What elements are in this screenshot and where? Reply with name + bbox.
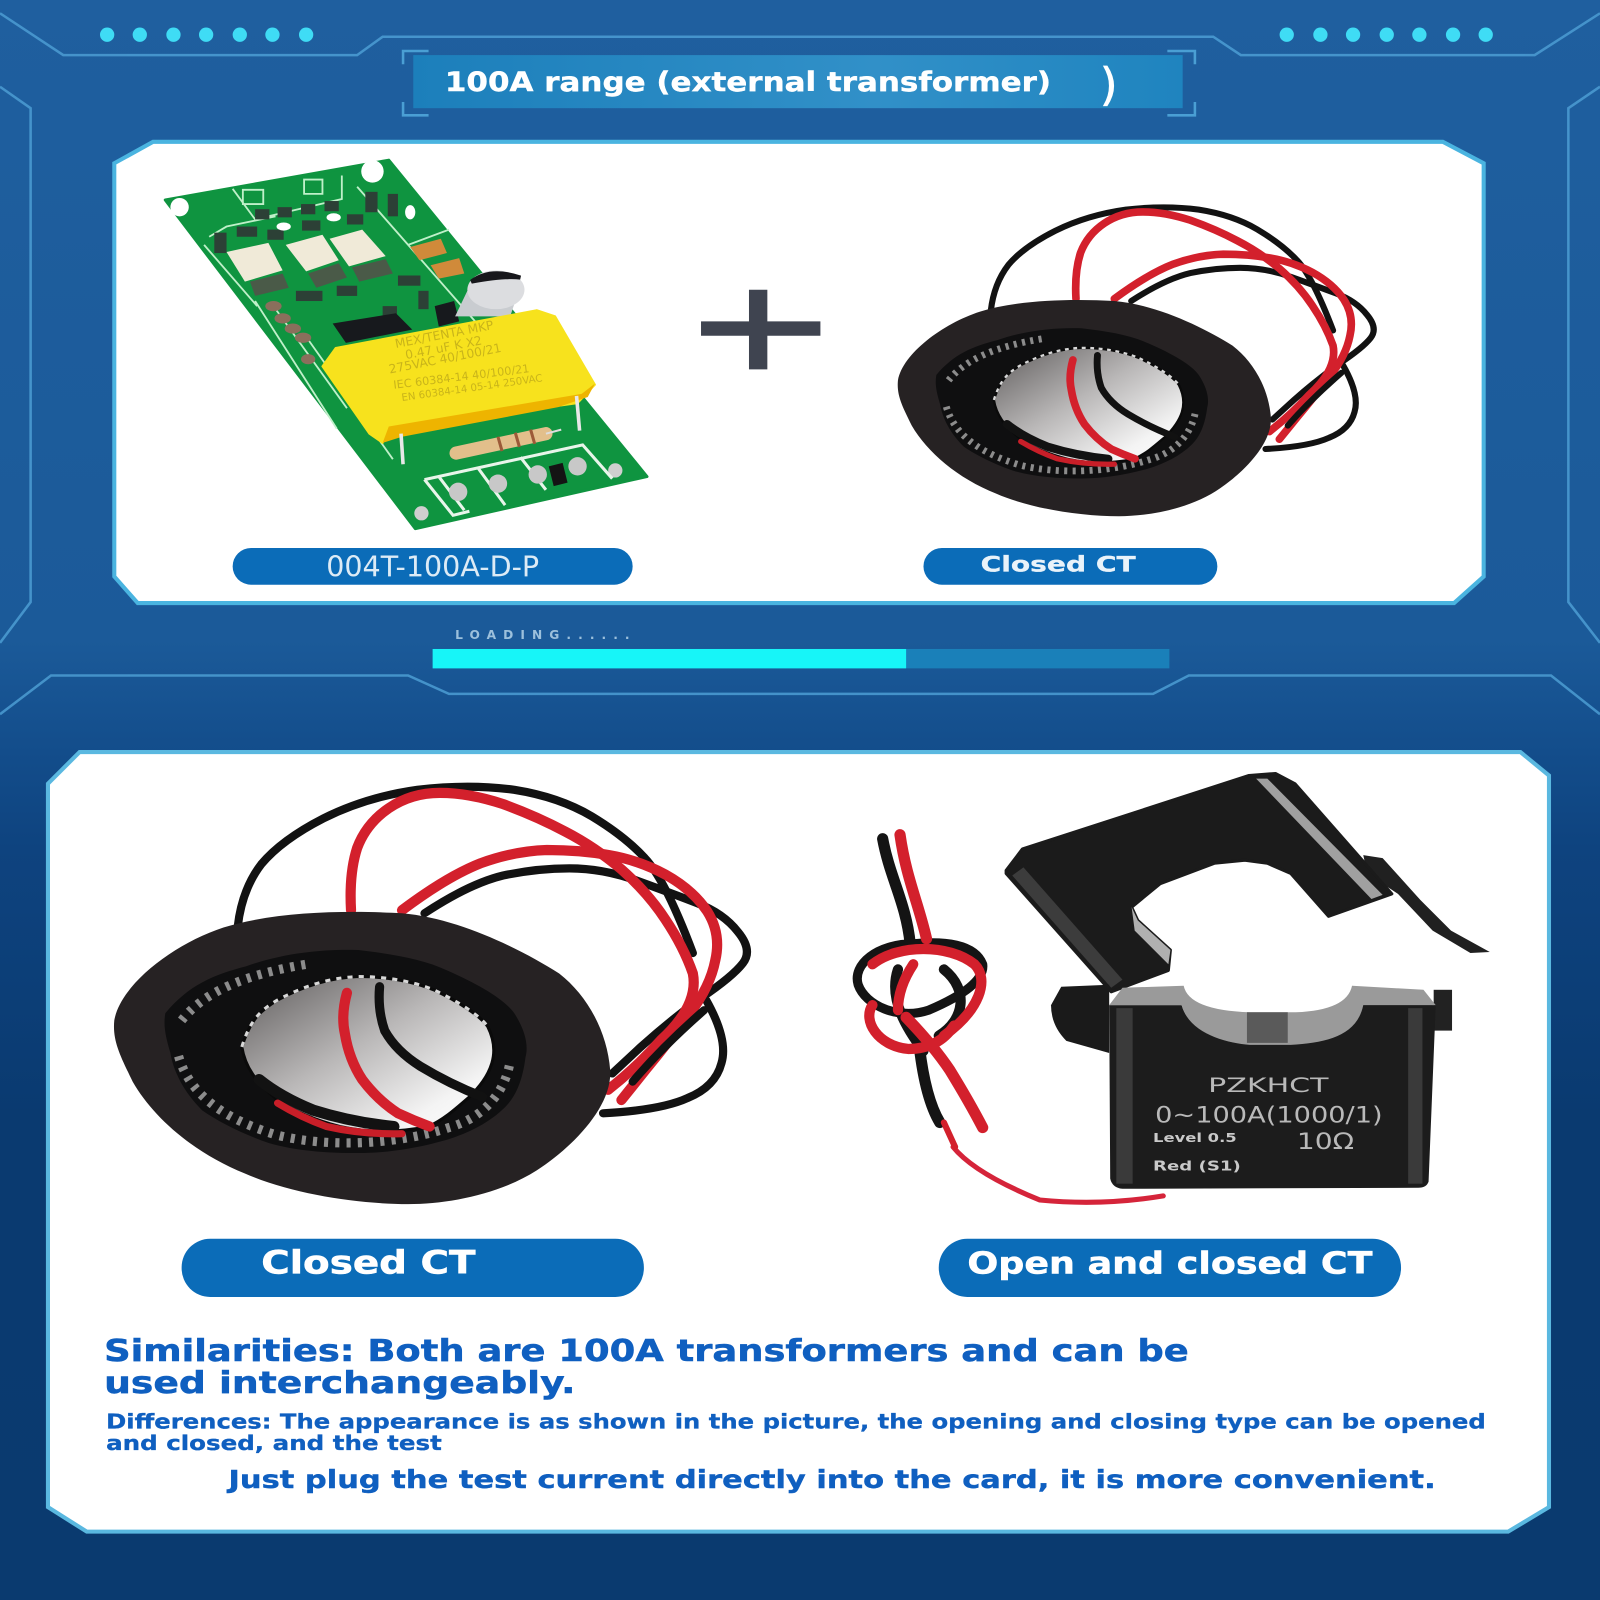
text block: similarities	[104, 1334, 1189, 1401]
icon: split-core current transformer: 0~100A(1000/1)	[1155, 1102, 1383, 1128]
icon: PCB module: EN 60384-14 05-14 250VAC	[401, 373, 543, 404]
icon: PCB module: 275VAC 40/100/21	[388, 341, 503, 376]
icon: plus sign	[701, 290, 820, 369]
icon: closed current transformer large	[114, 787, 747, 1204]
label: Closed CT large	[182, 1239, 644, 1297]
label: 004T-100A-D-P: 004T-100A-D-P	[326, 550, 539, 584]
label: Open and closed CT	[939, 1239, 1401, 1297]
text block: differences	[106, 1410, 1486, 1455]
text block: convenience note: Just plug the test current directly into the card, it is more convenient.	[226, 1465, 1436, 1494]
icon: closed current transformer	[898, 207, 1374, 516]
loading bar: LOADING......	[455, 628, 630, 642]
title banner: 100A range (external transformer)	[445, 67, 1051, 98]
icon: PCB module: MEX/TENTA MKP	[394, 318, 495, 351]
label: Open and closed CT: Open and closed CT	[967, 1246, 1373, 1281]
panel: CT comparison	[48, 752, 1549, 1532]
icon: PCB module: 0.47 uF K X2	[404, 334, 483, 362]
icon: split-core current transformer: Red (S1)	[1153, 1159, 1241, 1174]
title banner	[403, 51, 1195, 115]
label: Closed CT: Closed CT	[981, 552, 1136, 577]
icon: split-core current transformer: PZKHCT	[1208, 1074, 1329, 1097]
text block: differences: Differences: The appearance is as shown in the picture, the opening and closing type can be opened	[106, 1410, 1486, 1434]
label: Closed CT large: Closed CT	[261, 1245, 476, 1281]
icon: PCB module	[165, 160, 647, 529]
title banner: )	[1100, 58, 1118, 111]
loading bar	[433, 628, 1169, 668]
text block: similarities: Similarities: Both are 100A transformers and can be	[104, 1334, 1189, 1369]
label: Closed CT	[923, 548, 1217, 585]
text block: similarities: used interchangeably.	[104, 1366, 576, 1401]
panel: product set	[114, 142, 1484, 603]
icon: split-core current transformer: Level 0.5	[1153, 1131, 1237, 1146]
decorative dots left	[100, 28, 313, 42]
icon: split-core current transformer	[857, 773, 1490, 1202]
text block: differences: and closed, and the test	[106, 1431, 442, 1455]
decorative dots right	[1280, 28, 1493, 42]
label: 004T-100A-D-P	[233, 548, 633, 585]
icon: split-core current transformer: 10Ω	[1297, 1129, 1354, 1155]
icon: PCB module: IEC 60384-14 40/100/21	[393, 362, 530, 392]
